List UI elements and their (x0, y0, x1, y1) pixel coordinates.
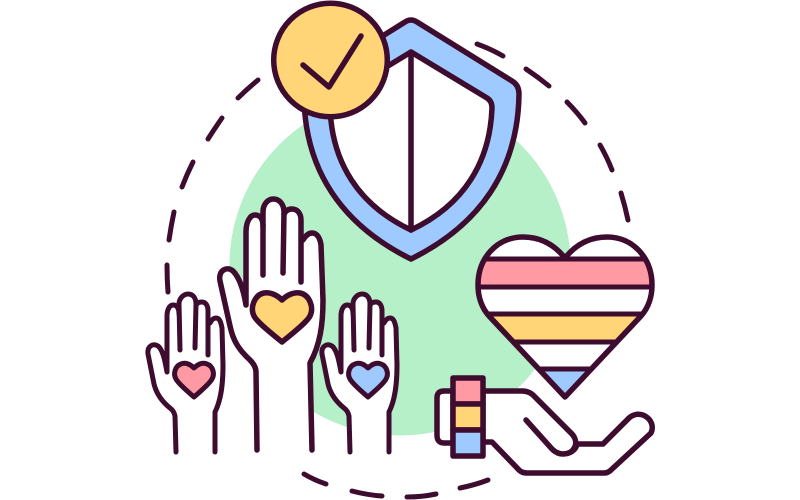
shield (304, 20, 519, 259)
yellow heart (252, 293, 312, 342)
check badge (274, 3, 387, 117)
striped heart (475, 234, 655, 400)
pink heart (175, 363, 213, 397)
open hand with striped cuff (437, 378, 652, 473)
big raised hand with yellow heart (220, 199, 323, 450)
blue heart (349, 363, 387, 397)
green background circle (230, 94, 570, 436)
infographic illustration (145, 0, 655, 500)
dashed ring (167, 44, 628, 497)
right small hand with blue heart (322, 294, 397, 452)
left small hand with pink heart (148, 294, 223, 452)
